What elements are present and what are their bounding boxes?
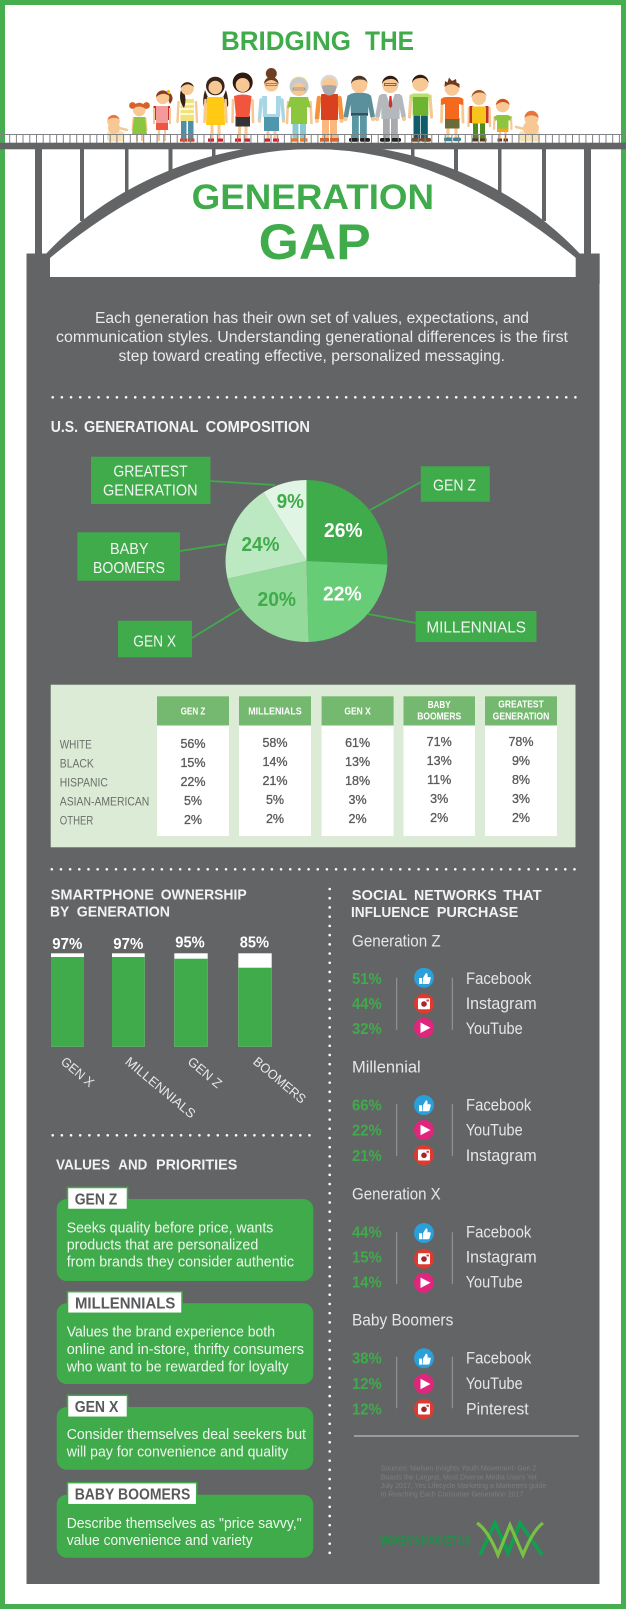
social group: millennial: Millennial — [352, 1058, 421, 1076]
icon: facebook — [414, 1348, 434, 1368]
bar: boomers: BOOMERS — [250, 1054, 309, 1107]
social group: generation x: 14% — [352, 1274, 382, 1291]
sources text: to Reaching Each Consumer Generation 2017 — [381, 1489, 523, 1498]
column: gen z: 5% — [184, 794, 202, 808]
pie chart: 20% — [258, 589, 296, 611]
label: gen x: GEN X — [133, 634, 176, 651]
social group: baby boomers: 38% — [352, 1350, 382, 1367]
column: millenials: 21% — [262, 774, 288, 788]
label: baby boomers — [77, 532, 180, 581]
title: gap: GAP — [259, 214, 371, 270]
social group: millennial — [352, 1058, 537, 1165]
illustration: row of people across generations — [107, 68, 540, 142]
social group: generation x: YouTube — [466, 1273, 523, 1291]
logo: womens marketing: WOMEN'S MARKETING — [380, 1533, 471, 1548]
social group: baby boomers: 12% — [352, 1401, 382, 1418]
bar: gen x: GEN X — [58, 1054, 97, 1090]
column: gen x: GEN X — [344, 705, 371, 717]
sources text: Sources: Nielsen Insights Youth Movement: Gen Z — [381, 1464, 537, 1473]
column: greatest generation: 8% — [512, 773, 530, 787]
person: woman in red — [232, 72, 253, 142]
card: millennials values: online and in-store, thrifty consumers — [67, 1342, 304, 1358]
icon: instagram — [414, 1249, 434, 1269]
table row labels: HISPANIC — [60, 775, 108, 789]
social group: generation z: 51% — [352, 971, 382, 988]
person: teen girl in stripes — [178, 82, 197, 142]
column: baby boomers: 3% — [430, 792, 448, 806]
card: gen z values — [57, 1188, 313, 1281]
column: baby boomers: BOOMERS — [417, 711, 461, 723]
label: gen x — [118, 621, 192, 657]
label: greatest generation: GENERATION — [103, 483, 198, 500]
intro text: Each generation has their own set of values, expectations, and — [95, 310, 529, 327]
social group: baby boomers: Pinterest — [466, 1400, 529, 1418]
person: toddler boy — [494, 99, 512, 142]
heading: social networks: INFLUENCE — [351, 905, 429, 921]
social group: generation z: Instagram — [466, 995, 537, 1013]
social group: generation z — [352, 932, 537, 1038]
icon: instagram — [414, 994, 434, 1014]
bar chart: smartphone ownership — [51, 934, 309, 1121]
column: baby boomers: 2% — [430, 811, 448, 825]
heading: U.S. generational composition — [51, 419, 310, 436]
social group: generation x: 44% — [352, 1224, 382, 1241]
label: greatest generation: GREATEST — [113, 464, 188, 481]
bar: gen z — [174, 934, 225, 1091]
heading: smartphone ownership: OWNERSHIP — [161, 888, 247, 904]
title: bridging the — [221, 26, 414, 56]
social group: baby boomers: YouTube — [466, 1375, 523, 1393]
card: millennials values: Values the brand experience both — [67, 1325, 275, 1341]
social group: baby boomers — [352, 1312, 532, 1419]
heading: values and priorities: PRIORITIES — [156, 1158, 237, 1174]
person: baby left — [107, 115, 127, 142]
column: gen x: 13% — [345, 755, 370, 769]
social group: baby boomers: Facebook — [466, 1349, 532, 1367]
bar: millennials: MILLENNIALS — [122, 1054, 199, 1121]
label: gen z — [421, 466, 490, 502]
person: woman in yellow — [203, 77, 228, 142]
social group: generation x: Generation X — [352, 1185, 441, 1203]
heading: social networks: NETWORKS — [414, 888, 497, 904]
column: baby boomers: BABY — [428, 699, 451, 711]
social group: millennial: Instagram — [466, 1147, 537, 1165]
social group: millennial: YouTube — [466, 1122, 523, 1140]
social group: generation z: YouTube — [466, 1020, 523, 1038]
heading: social networks — [351, 888, 542, 921]
social group: generation x: 15% — [352, 1249, 382, 1266]
bridge railing — [0, 134, 626, 143]
label: greatest generation — [91, 457, 210, 504]
card: millennials values: who want to be rewarded for loyalty — [66, 1359, 289, 1375]
bar: gen x: 97% — [52, 936, 83, 953]
person: man in green plaid — [410, 75, 432, 142]
column: gen z: GEN Z — [181, 705, 206, 717]
column: gen x: 2% — [349, 812, 367, 826]
social group: generation z: 32% — [352, 1021, 382, 1038]
card: millennials values: MILLENNIALS — [75, 1296, 176, 1313]
card: baby boomers values — [57, 1483, 313, 1558]
bridge structure — [0, 143, 626, 284]
icon: pinterest — [414, 1399, 434, 1419]
card: gen z values: Seeks quality before price, wants — [67, 1221, 273, 1237]
column: greatest generation — [485, 696, 557, 836]
icon: facebook — [414, 1223, 434, 1243]
heading: values and priorities: AND — [118, 1158, 148, 1174]
icon: youtube play — [414, 1374, 434, 1394]
column: baby boomers: 71% — [427, 735, 452, 749]
panel: demographics table — [51, 685, 575, 847]
column: gen z — [157, 696, 229, 836]
person: boy with backpack — [468, 90, 490, 142]
bar: boomers: 85% — [240, 934, 269, 951]
card: gen z values: from brands they consider authentic — [67, 1255, 294, 1271]
title: bridging the: BRIDGING — [221, 26, 351, 56]
column: greatest generation: GENERATION — [493, 711, 549, 723]
heading: smartphone ownership — [50, 888, 247, 920]
icon: facebook — [414, 968, 434, 988]
bar: gen z: GEN Z — [185, 1054, 225, 1091]
social group: generation x — [352, 1185, 537, 1293]
heading: U.S. generational composition: U.S. — [51, 419, 78, 436]
label: millennials — [416, 611, 536, 642]
intro text: step toward creating effective, personalized messaging. — [118, 348, 505, 365]
label: baby boomers: BABY — [110, 541, 149, 558]
column: millenials: 14% — [262, 755, 288, 769]
sources text — [381, 1464, 546, 1498]
label: millennials: MILLENNIALS — [426, 619, 526, 636]
column: millenials: 58% — [262, 736, 288, 750]
heading: smartphone ownership: SMARTPHONE — [51, 888, 154, 904]
heading: social networks: SOCIAL — [352, 888, 407, 904]
table row labels: OTHER — [60, 813, 93, 827]
pie chart: 24% — [242, 534, 280, 556]
column: gen x: 3% — [349, 793, 367, 807]
social group: millennial: 21% — [352, 1148, 382, 1165]
person: toddler girl — [129, 102, 150, 141]
table row labels — [60, 737, 149, 827]
heading: smartphone ownership: GENERATION — [77, 904, 170, 920]
card: gen x values: will pay for convenience and quality — [66, 1444, 289, 1460]
heading: social networks: THAT — [503, 888, 542, 904]
social group: generation z: 44% — [352, 996, 382, 1013]
bar: millennials: 97% — [113, 936, 144, 953]
pie chart: 22% — [323, 584, 362, 606]
logo: womens marketing — [380, 1523, 543, 1555]
label: gen z: GEN Z — [433, 478, 476, 495]
icon: youtube play — [414, 1120, 434, 1140]
person: girl with pink dress — [154, 90, 172, 141]
column: gen z: 56% — [180, 737, 206, 751]
title: bridging the: THE — [365, 26, 414, 56]
title: generation: GENERATION — [192, 178, 434, 217]
icon: facebook — [414, 1095, 434, 1115]
person: woman in blue jacket — [258, 68, 285, 142]
column: millenials — [239, 696, 311, 836]
heading: social networks: PURCHASE — [437, 905, 518, 921]
card: gen x values: Consider themselves deal seekers but — [67, 1427, 306, 1443]
column: baby boomers: 11% — [427, 773, 451, 787]
heading: smartphone ownership: BY — [50, 904, 69, 920]
column: greatest generation: GREATEST — [498, 699, 544, 711]
column: greatest generation: 78% — [508, 735, 534, 749]
column: greatest generation: 2% — [512, 811, 530, 825]
sources text: Boasts the Largest, Most Diverse Media Users Yet — [381, 1472, 538, 1481]
person: boy in orange — [441, 78, 463, 141]
pie chart: 26% — [324, 520, 363, 542]
intro text — [56, 310, 569, 365]
social group: baby boomers: 12% — [352, 1376, 382, 1393]
column: greatest generation: 3% — [512, 792, 530, 806]
person: man in grey suit — [375, 76, 406, 142]
column: gen x — [322, 696, 394, 836]
column: gen z: 15% — [180, 756, 206, 770]
bar: boomers — [238, 934, 309, 1107]
icon: youtube play — [414, 1273, 434, 1293]
main grey panel — [26, 277, 600, 1584]
social group: millennial: 22% — [352, 1123, 382, 1140]
person: grandfather — [315, 75, 344, 142]
pie label leader lines — [180, 481, 421, 638]
column: millenials: 2% — [266, 812, 284, 826]
column: baby boomers — [404, 696, 475, 836]
column: millenials: MILLENIALS — [248, 705, 302, 717]
table row labels: BLACK — [60, 756, 94, 770]
label: baby boomers: BOOMERS — [93, 560, 165, 577]
person: grandmother — [287, 77, 312, 142]
bar: gen x — [51, 936, 97, 1090]
table row labels: WHITE — [60, 737, 92, 751]
social group: millennial: Facebook — [466, 1097, 532, 1115]
social group: baby boomers: Baby Boomers — [352, 1312, 453, 1330]
card: baby boomers values: value convenience and variety — [67, 1533, 253, 1549]
sources text: July 2017, Yes Lifecycle Marketing a Marketers guide — [381, 1481, 546, 1490]
pie chart — [226, 480, 387, 642]
icon: youtube play — [414, 1018, 434, 1038]
bar: gen z: 95% — [175, 934, 205, 951]
card: millennials values — [57, 1292, 313, 1384]
card: gen x values — [57, 1395, 313, 1470]
intro text: communication styles. Understanding generational differences is the first — [56, 329, 569, 346]
bar: millennials — [112, 936, 199, 1121]
icon: instagram — [414, 1145, 434, 1165]
pie chart: 9% — [277, 491, 304, 513]
card: baby boomers values: Describe themselves as "price savvy," — [67, 1516, 302, 1532]
heading: values and priorities — [56, 1158, 237, 1174]
social group: generation z: Generation Z — [352, 932, 441, 950]
heading: U.S. generational composition: GENERATIONAL — [84, 419, 198, 436]
card: baby boomers values: BABY BOOMERS — [75, 1486, 191, 1503]
column: gen z: 2% — [184, 813, 202, 827]
person: man in teal sweater — [343, 76, 375, 142]
person: baby right — [516, 111, 540, 142]
social group: generation x: Instagram — [466, 1248, 537, 1266]
social group: millennial: 66% — [352, 1098, 382, 1115]
social group: generation x: Facebook — [466, 1223, 532, 1241]
column: gen z: 22% — [180, 775, 206, 789]
column: baby boomers: 13% — [427, 754, 452, 768]
heading: U.S. generational composition: COMPOSITION — [206, 419, 310, 436]
column: greatest generation: 9% — [512, 754, 530, 768]
table row labels: ASIAN-AMERICAN — [60, 794, 149, 808]
card: gen z values: products that are personalized — [67, 1238, 258, 1254]
card: gen x values: GEN X — [75, 1399, 119, 1416]
social group: generation z: Facebook — [466, 970, 532, 988]
column: gen x: 18% — [345, 774, 370, 788]
column: gen x: 61% — [345, 736, 370, 750]
column: millenials: 5% — [266, 793, 284, 807]
heading: values and priorities: VALUES — [56, 1158, 110, 1174]
card: gen z values: GEN Z — [75, 1191, 117, 1208]
